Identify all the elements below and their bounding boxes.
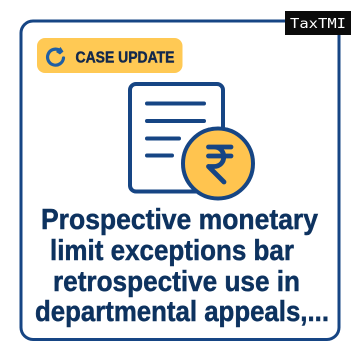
watermark background	[285, 11, 351, 35]
headline: departmental appeals,...	[35, 296, 329, 328]
badge: case update	[37, 38, 182, 73]
headline: limit exceptions bar	[50, 235, 294, 267]
badge background	[37, 38, 182, 73]
badge label: CASE UPDATE	[76, 50, 174, 66]
watermark: TaxTMI	[285, 11, 351, 35]
headline: Prospective monetary	[41, 204, 318, 236]
watermark text: TaxTMI	[290, 17, 346, 32]
headline	[35, 204, 329, 328]
icon: document	[130, 84, 223, 192]
panel: card outline	[21, 21, 339, 340]
icon: document with rupee coin	[130, 84, 253, 198]
icon: refresh	[48, 47, 64, 65]
headline: retrospective use in	[53, 266, 300, 298]
icon: rupee coin	[183, 128, 253, 198]
